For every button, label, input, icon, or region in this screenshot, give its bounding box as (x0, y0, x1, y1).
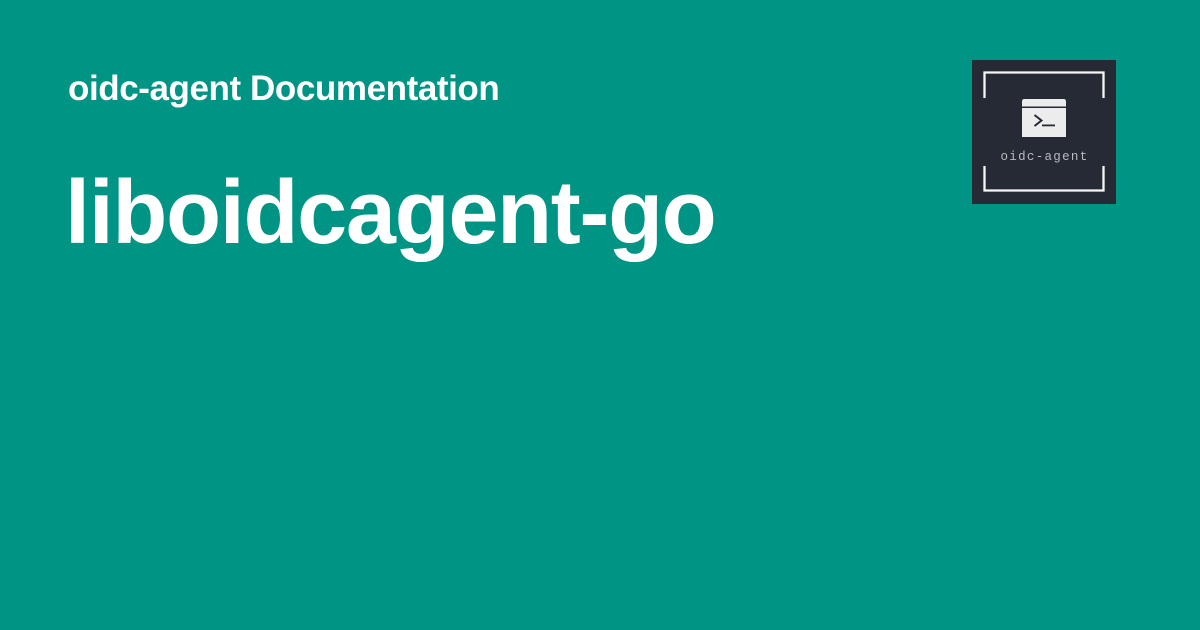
logo text: oidc-agent (1000, 150, 1089, 164)
icon: terminal window (1022, 99, 1066, 137)
logo: oidc-agent terminal (972, 60, 1116, 204)
site name heading: oidc-agent Documentation (68, 69, 499, 108)
logo frame brackets (984, 72, 1104, 190)
page title: liboidcagent-go (65, 163, 715, 263)
